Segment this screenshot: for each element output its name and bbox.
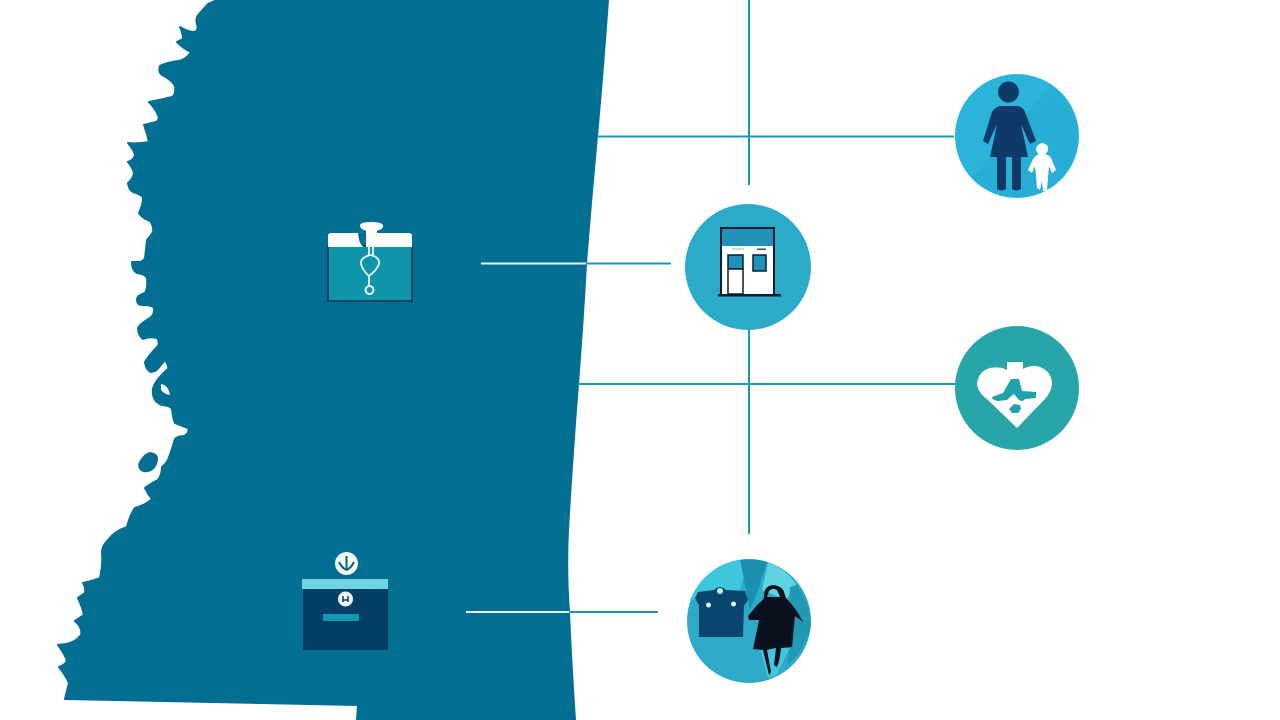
shirt shape bbox=[695, 587, 748, 637]
connector: vertical line to bags bbox=[748, 328, 750, 534]
connector: line to bags circle bbox=[466, 611, 658, 613]
icon: mother and child circle bbox=[955, 74, 1079, 198]
icon: dark box with badge bbox=[302, 552, 388, 650]
icon: clinic building circle bbox=[685, 204, 811, 330]
icon: heart circle bbox=[955, 326, 1079, 450]
white notches bbox=[161, 384, 170, 395]
connector: top vertical line bbox=[748, 0, 750, 185]
blob: detached map island bbox=[138, 452, 158, 472]
connector: line to building circle bbox=[481, 262, 671, 264]
icon: medical box with stethoscope bbox=[328, 222, 412, 301]
connector: line to person circle bbox=[597, 136, 954, 138]
connector: line to heart circle bbox=[578, 383, 956, 385]
apron figure bbox=[748, 585, 803, 675]
mother figure bbox=[983, 82, 1036, 190]
icon: clothing and bag circle bbox=[687, 559, 811, 683]
child figure bbox=[1028, 143, 1056, 191]
panel: blue map silhouette bbox=[58, 0, 608, 720]
